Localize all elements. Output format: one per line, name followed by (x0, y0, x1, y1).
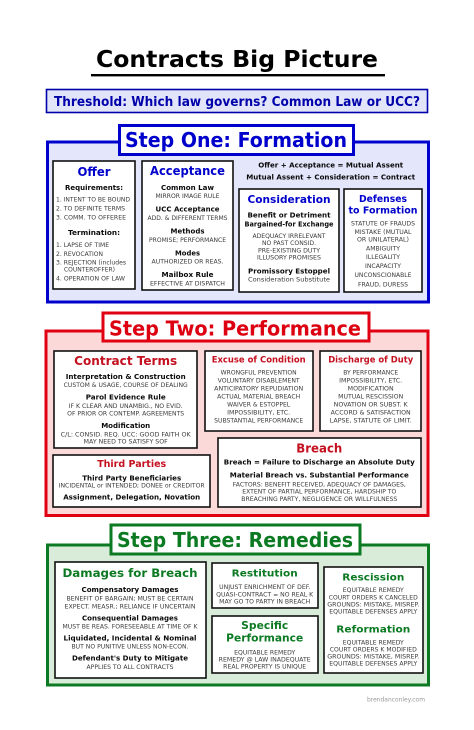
box: defenses to formation: UNCONSCIONABLE (354, 272, 412, 279)
box: defenses to formation: MISTAKE (MUTUAL (354, 229, 412, 236)
box: offer: 2. TO DEFINITE TERMS (56, 206, 125, 213)
box: discharge of duty: LAPSE, STATUTE OF LIMIT. (330, 418, 412, 425)
box: excuse of condition: VOLUNTARY DISABLEMENT (218, 378, 300, 385)
box: breach: BREACHING PARTY, NEGLIGENCE OR WILLFULNESS (241, 496, 397, 503)
box: rescission and reformation: EQUITABLE DEFENSES APPLY (329, 661, 418, 668)
box: defenses to formation: AMBIGUITY (366, 245, 400, 252)
box: damages for breach: APPLIES TO ALL CONTRACTS (86, 664, 174, 671)
box: defenses to formation: Defenses (359, 194, 407, 205)
threshold banner: Threshold: Which law governs? Common Law or UCC? (54, 95, 420, 110)
box: rescission and reformation: Reformation (336, 625, 410, 636)
box: discharge of duty: NOVATION OR SUBST. K (334, 402, 409, 409)
box: consideration: Bargained-for Exchange (244, 219, 334, 228)
box: consideration: ADEQUACY IRRELEVANT (252, 233, 326, 240)
box: excuse of condition: WRONGFUL PREVENTION (221, 369, 297, 376)
box: third parties: Third Party Beneficiaries (82, 473, 181, 482)
heading: step three: Step Three: Remedies (117, 528, 353, 552)
box: breach (218, 438, 421, 507)
box: restitution: QUASI-CONTRACT = NO REAL K (216, 591, 314, 598)
box: specific performance: Specific (241, 620, 288, 632)
box: acceptance: Mailbox Rule (162, 270, 214, 279)
box: damages for breach: MUST BE REAS. FORESEEABLE AT TIME OF K (62, 624, 199, 631)
box: consideration: Promissory Estoppel (248, 266, 330, 275)
box: contract terms: Contract Terms (74, 354, 177, 368)
box: defenses to formation: ILLEGALITY (366, 254, 400, 261)
box: defenses to formation: to Formation (348, 205, 418, 216)
box: restitution (212, 563, 318, 608)
box: consideration (239, 189, 339, 292)
box: excuse of condition: ANTICIPATORY REPUDIATION (214, 386, 303, 393)
box: excuse of condition: ACTUAL MATERIAL BREACH (217, 394, 300, 401)
box: specific performance: Performance (226, 633, 303, 645)
box: rescission and reformation: Rescission (342, 572, 404, 583)
heading: step one: Step One: Formation (125, 128, 347, 152)
box: contract terms: Modification (101, 421, 150, 430)
box: consideration: Consideration Substitute (248, 277, 330, 284)
box: offer: 2. REVOCATION (56, 251, 103, 258)
box: contract terms: Interpretation & Construction (66, 372, 186, 381)
box: third parties (53, 455, 210, 507)
box: offer: 1. INTENT TO BE BOUND (56, 197, 130, 204)
box: contract terms: Parol Evidence Rule (86, 393, 166, 402)
box: excuse of condition: Excuse of Condition (212, 355, 306, 365)
box: discharge of duty: MUTUAL RESCISSION (338, 394, 403, 401)
formula text (246, 161, 416, 182)
box: rescission and reformation: GROUNDS: MISTAKE, MISREP. (327, 601, 419, 608)
box: excuse of condition (205, 351, 313, 431)
panel: step two performance (46, 313, 428, 516)
box: specific performance (212, 616, 318, 673)
box: contract terms: IF K CLEAR AND UNAMBIG., NO EVID. (69, 403, 183, 410)
box: rescission and reformation: EQUITABLE REMEDY (343, 639, 404, 646)
box: acceptance: AUTHORIZED OR REAS. (152, 259, 224, 266)
box: acceptance: MIRROR IMAGE RULE (156, 193, 220, 200)
box: consideration: PRE-EXISTING DUTY (258, 247, 320, 254)
box: consideration: Consideration (248, 193, 330, 206)
box: discharge of duty (320, 351, 421, 431)
box: consideration: ILLUSORY PROMISES (257, 254, 321, 261)
box: rescission and reformation: EQUITABLE REMEDY (343, 587, 404, 594)
box: offer: Requirements: (65, 183, 123, 192)
box: specific performance: REAL PROPERTY IS UNIQUE (223, 664, 306, 671)
box: excuse of condition: SUBSTANTIAL PERFORMANCE (214, 418, 303, 425)
box: restitution: UNJUST ENRICHMENT OF DEF. (219, 584, 310, 591)
box: rescission and reformation (324, 567, 423, 673)
box: damages for breach: BENEFIT OF BARGAIN; MUST BE CERTAIN (66, 596, 194, 603)
box: offer: 1. LAPSE OF TIME (56, 242, 109, 249)
box: acceptance: Common Law (161, 183, 214, 192)
box: offer: 3. REJECTION (includes (56, 260, 126, 267)
box: contract terms (54, 351, 197, 448)
panel: step three remedies (48, 525, 428, 685)
box: acceptance (142, 161, 233, 290)
box: defenses to formation: FRAUD, DURESS (358, 281, 408, 288)
credit: brendanconley.com (367, 697, 425, 704)
box: damages for breach: Compensatory Damages (82, 585, 178, 594)
box: acceptance: ADD. & DIFFERENT TERMS (148, 215, 228, 222)
box: restitution: MAY GO TO PARTY IN BREACH (219, 598, 310, 605)
box: damages for breach: EXPECT. MEASR.; RELIANCE IF UNCERTAIN (64, 603, 196, 610)
box: rescission and reformation: GROUNDS: MISTAKE, MISREP. (327, 654, 419, 661)
box: rescission and reformation: COURT ORDERS K CANCELED (329, 594, 418, 601)
box: damages for breach: Defendant's Duty to Mitigate (72, 654, 188, 663)
box: offer: 4. OPERATION OF LAW (56, 276, 125, 283)
box: acceptance: PROMISE; PERFORMANCE (149, 237, 226, 244)
box: breach: FACTORS: BENEFIT RECEIVED, ADEQUACY OF DAMAGES, (233, 481, 406, 488)
box: defenses to formation: OR UNILATERAL) (357, 236, 409, 243)
box: rescission and reformation: COURT ORDERS K MODIFIED (330, 646, 417, 653)
box: excuse of condition: WAIVER & ESTOPPEL (227, 402, 291, 409)
box: acceptance: EFFECTIVE AT DISPATCH (150, 281, 225, 288)
box: contract terms: MAY NEED TO SATISFY SOF (84, 438, 168, 445)
box: specific performance: EQUITABLE REMEDY (234, 649, 296, 656)
box: third parties: Third Parties (97, 459, 167, 470)
box: offer (53, 161, 135, 289)
box: consideration: Benefit or Detriment (248, 211, 331, 220)
heading: step two: Step Two: Performance (109, 316, 361, 340)
box: discharge of duty: ACCORD & SATISFACTION (331, 410, 411, 417)
box: acceptance: Acceptance (150, 164, 225, 178)
box: defenses to formation (344, 189, 422, 292)
box: acceptance: Modes (175, 248, 200, 257)
box: acceptance: UCC Acceptance (156, 205, 220, 214)
box: breach: Breach = Failure to Discharge an Absolute Duty (224, 457, 415, 466)
box: third parties: INCIDENTAL or INTENDED; DONEE or CREDITOR (59, 483, 205, 490)
formula text: Mutual Assent + Consideration = Contract (246, 173, 416, 182)
box: acceptance: Methods (170, 227, 204, 236)
box: excuse of condition: IMPOSSIBILITY, ETC. (227, 410, 290, 417)
box: third parties: Assignment, Delegation, Novation (63, 493, 200, 502)
box: contract terms: C/L: CONSID. REQ. UCC: GOOD FAITH OK (61, 431, 192, 438)
box: damages for breach: Consequential Damages (82, 613, 178, 622)
box: specific performance: REMEDY @ LAW INADEQUATE (219, 656, 311, 663)
panel: step one formation (48, 126, 428, 302)
threshold banner (46, 90, 428, 112)
box: damages for breach: BUT NO PUNITIVE UNLESS NON-ECON. (72, 644, 189, 651)
box: discharge of duty: BY PERFORMANCE (343, 369, 398, 376)
box: defenses to formation: INCAPACITY (365, 263, 401, 270)
box: consideration: NO PAST CONSID. (262, 240, 316, 247)
box: offer: Termination: (68, 228, 120, 237)
box: breach: Material Breach vs. Substantial Performance (230, 470, 409, 479)
box: offer: 3. COMM. TO OFFEREE (56, 215, 126, 222)
box: discharge of duty: IMPOSSIBILITY, ETC. (339, 378, 402, 385)
box: breach: EXTENT OF PARTIAL PERFORMANCE, HARDSHIP TO (242, 489, 397, 496)
box: damages for breach: Damages for Breach (62, 566, 198, 580)
box: offer: COUNTEROFFER) (64, 267, 115, 274)
box: contract terms: CUSTOM & USAGE, COURSE OF DEALING (64, 382, 188, 389)
formula text: Offer + Acceptance = Mutual Assent (258, 161, 404, 170)
box: breach: Breach (296, 441, 342, 455)
box: rescission and reformation: EQUITABLE DEFENSES APPLY (329, 609, 418, 616)
box: contract terms: OF PRIOR OR CONTEMP. AGREEMENTS (67, 410, 184, 417)
box: offer: Offer (78, 165, 111, 179)
box: discharge of duty: MODIFICATION (348, 386, 394, 393)
box: discharge of duty: Discharge of Duty (328, 355, 414, 365)
title: Contracts Big Picture (96, 45, 378, 73)
box: restitution: Restitution (232, 569, 298, 580)
box: defenses to formation: STATUTE OF FRAUDS (351, 220, 415, 227)
box: damages for breach (55, 562, 206, 678)
box: damages for breach: Liquidated, Incidental & Nominal (64, 634, 196, 643)
